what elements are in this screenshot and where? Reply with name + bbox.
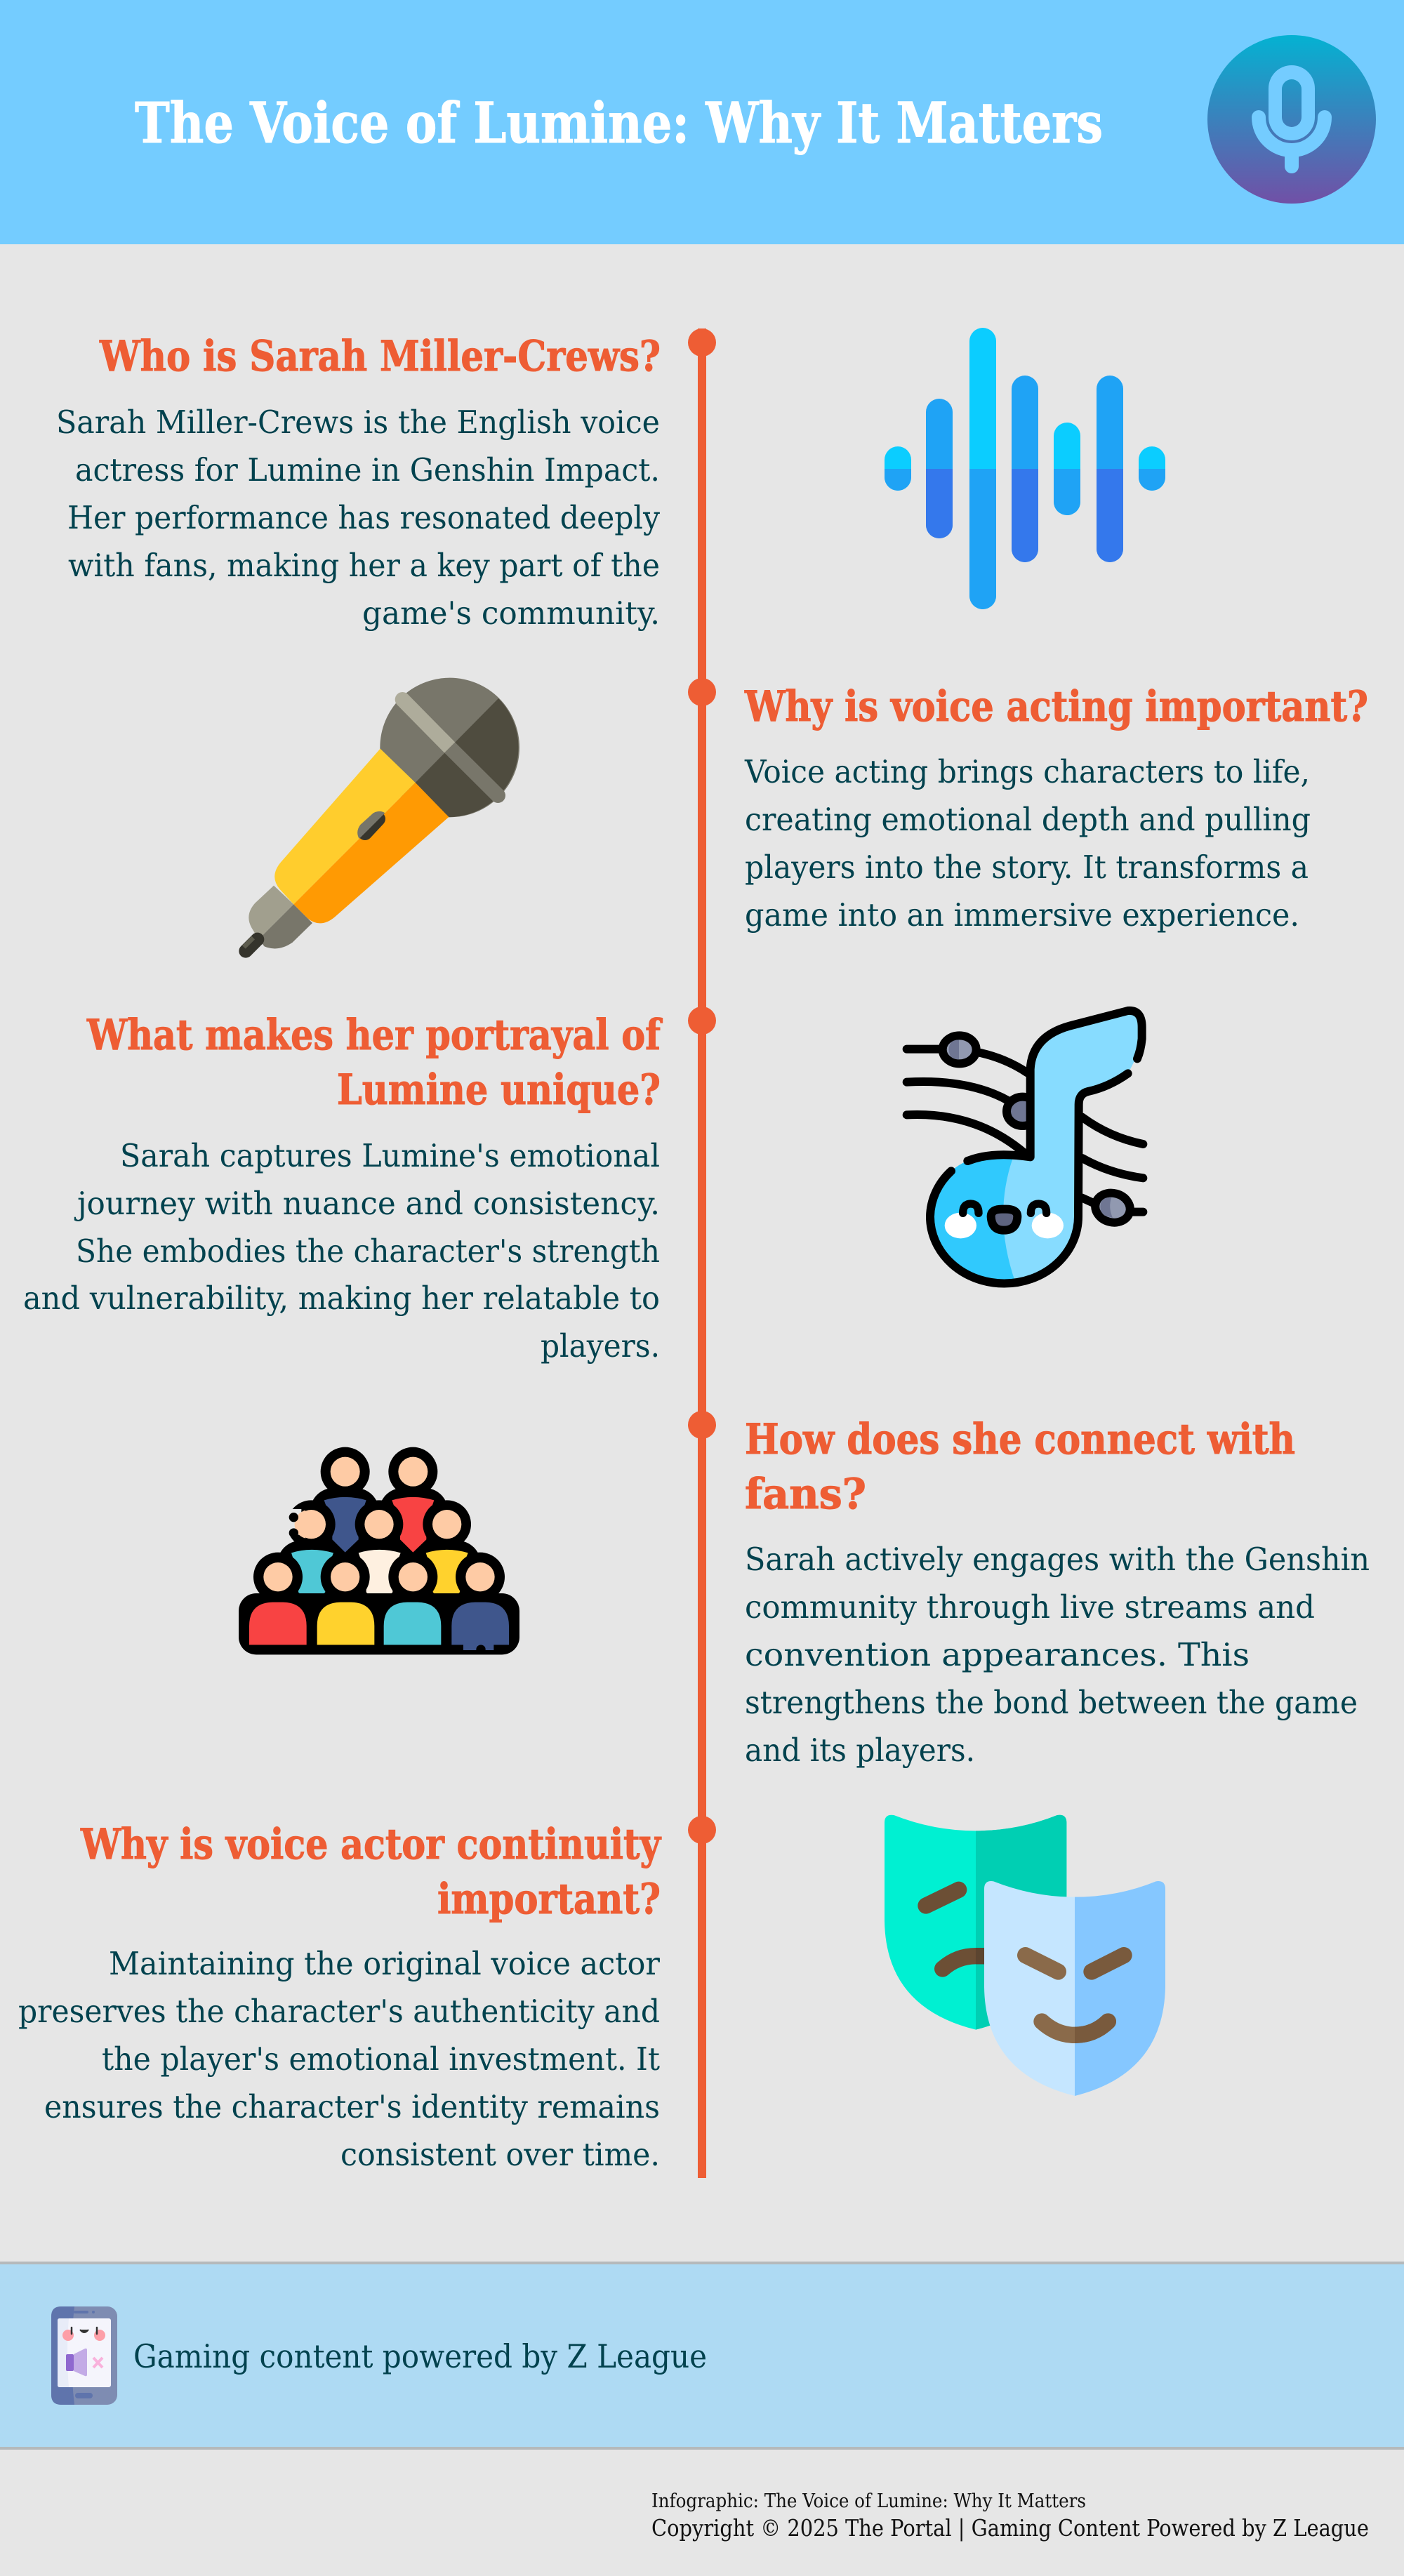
- heading: [80, 1820, 662, 1924]
- heading: What makes her portrayal of: [86, 1011, 663, 1060]
- footer credits: Copyright © 2025 The Portal | Gaming Content Powered by Z League: [651, 2514, 1369, 2542]
- sponsor band: [0, 2262, 1404, 2450]
- body text: Her performance has resonated deeply: [67, 499, 660, 536]
- body text: Sarah actively engages with the Genshin: [745, 1541, 1370, 1578]
- body text: [23, 1137, 660, 1365]
- heading: [745, 1415, 1295, 1519]
- body text: Sarah captures Lumine's emotional: [120, 1137, 660, 1174]
- header band: [0, 0, 1404, 244]
- body text: journey with nuance and consistency.: [74, 1185, 660, 1222]
- panel: who is Sarah Miller-Crews: [56, 328, 1165, 632]
- footer credits: Infographic: The Voice of Lumine: Why It Matters: [651, 2490, 1086, 2512]
- heading: Why is voice acting important?: [744, 682, 1368, 731]
- body text: [745, 1541, 1370, 1769]
- body text: the player's emotional investment. It: [102, 2040, 660, 2078]
- body text: She embodies the character's strength: [76, 1233, 660, 1270]
- heading: fans?: [745, 1470, 866, 1519]
- body text: Maintaining the original voice actor: [109, 1945, 661, 1982]
- panel: how does she connect with fans: [239, 1415, 1370, 1769]
- title: The Voice of Lumine: Why It Matters: [135, 90, 1103, 156]
- body text: convention appearances. This: [745, 1636, 1250, 1673]
- body text: players into the story. It transforms a: [745, 849, 1309, 886]
- panel: why is voice acting important: [244, 678, 1368, 951]
- body text: and vulnerability, making her relatable to: [23, 1280, 660, 1317]
- panel: what makes her portrayal unique: [23, 1011, 1143, 1365]
- body text: game's community.: [362, 595, 660, 632]
- heading: How does she connect with: [745, 1415, 1295, 1464]
- body text: strengthens the bond between the game: [745, 1684, 1358, 1721]
- body text: actress for Lumine in Genshin Impact.: [75, 451, 660, 489]
- body text: [56, 404, 660, 632]
- icon: sound wave: [885, 328, 1165, 609]
- body text: with fans, making her a key part of the: [68, 547, 660, 584]
- body text: ensures the character's identity remains: [44, 2088, 660, 2125]
- heading: [86, 1011, 663, 1115]
- body text: [18, 1945, 661, 2173]
- icon: handheld microphone: [244, 678, 519, 951]
- icon: phone with muted speaker: [51, 2306, 117, 2405]
- body text: [744, 753, 1311, 934]
- icon: audience crowd: [239, 1447, 519, 1654]
- body text: preserves the character's authenticity and: [18, 1993, 660, 2030]
- body text: and its players.: [745, 1732, 975, 1769]
- body text: community through live streams and: [745, 1588, 1315, 1626]
- body text: Voice acting brings characters to life,: [744, 753, 1310, 790]
- body text: Sarah Miller-Crews is the English voice: [56, 404, 660, 441]
- body text: creating emotional depth and pulling: [745, 801, 1311, 838]
- icon: theatre masks: [885, 1815, 1165, 2096]
- timeline: [688, 328, 716, 2178]
- icon: microphone badge: [1207, 35, 1376, 204]
- footer credits: [651, 2490, 1369, 2542]
- heading: Why is voice actor continuity: [80, 1820, 662, 1869]
- icon: cute music note: [907, 1011, 1143, 1284]
- heading: Lumine unique?: [337, 1065, 661, 1115]
- body text: consistent over time.: [340, 2136, 660, 2173]
- sponsor text: Gaming content powered by Z League: [133, 2337, 707, 2375]
- body text: game into an immersive experience.: [745, 896, 1299, 934]
- body text: players.: [541, 1327, 660, 1365]
- heading: Who is Sarah Miller-Crews?: [99, 332, 661, 381]
- heading: important?: [437, 1875, 661, 1924]
- panel: why is voice actor continuity important: [18, 1815, 1165, 2173]
